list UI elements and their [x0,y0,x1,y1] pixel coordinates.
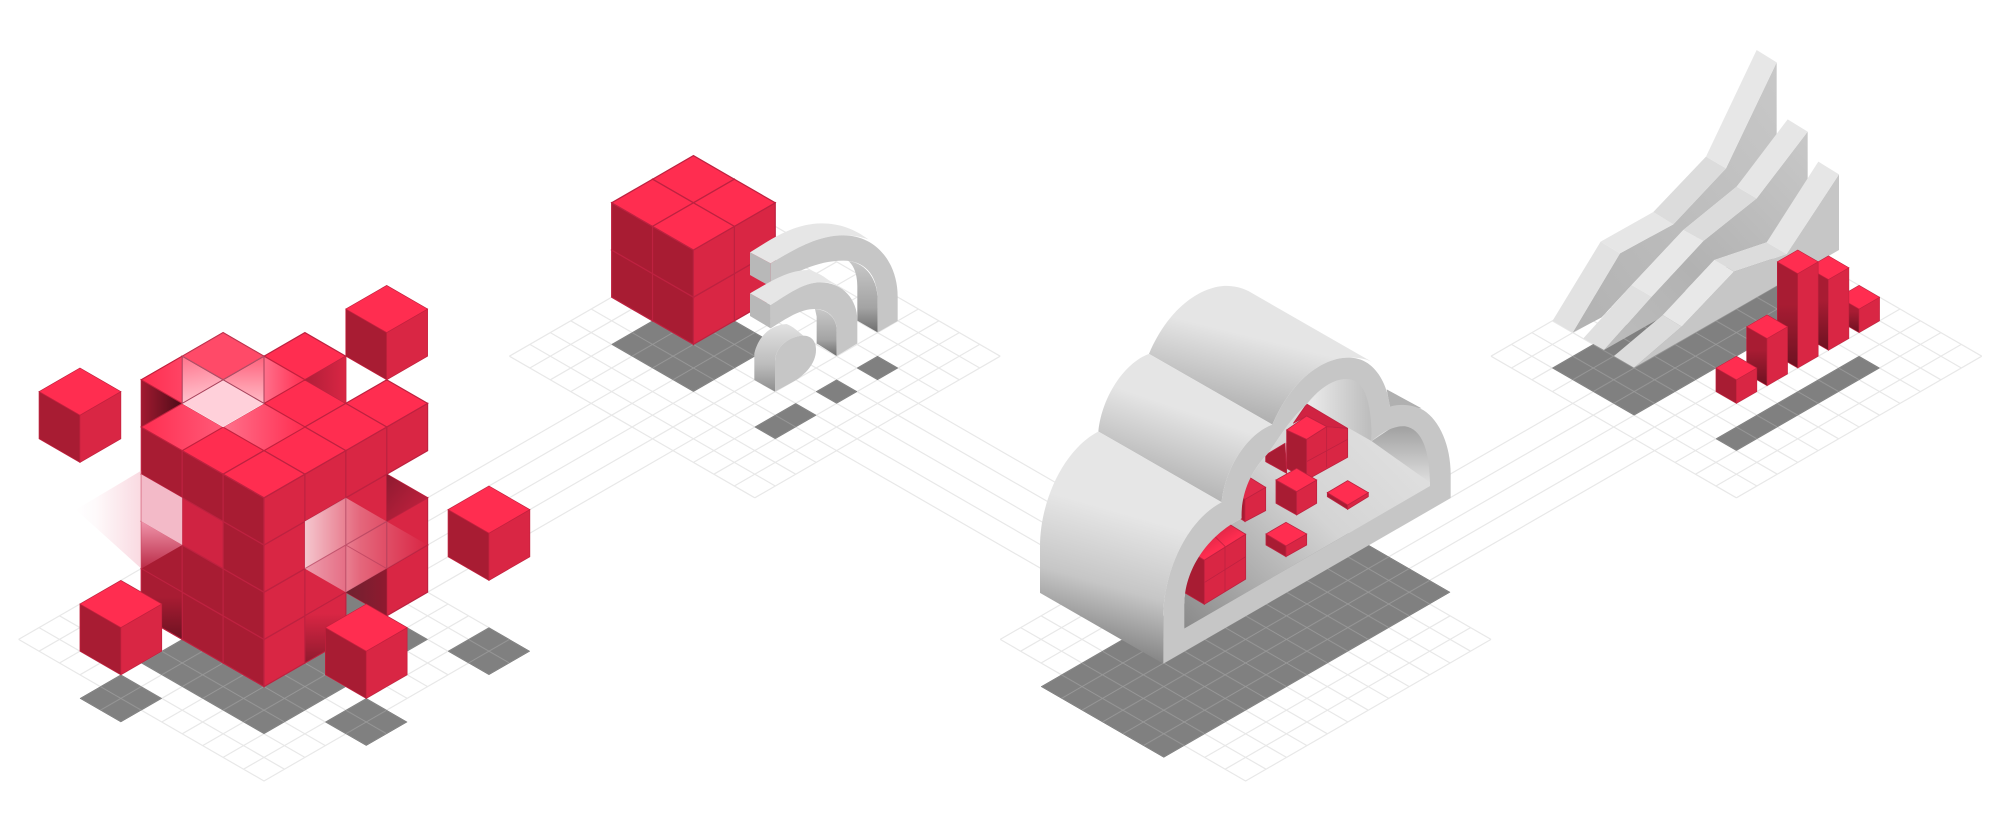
floor shadow 3 [1041,521,1450,757]
cloud outer surfaces [1040,286,1422,664]
icon: extruded cloud [1040,286,1451,664]
floor grid 1 [19,498,509,781]
wifi dot [754,324,816,392]
floor shadows 4 [1552,250,1880,451]
bar 3 [1777,250,1818,368]
panel: cloud [1000,286,1491,781]
glass highlights and shading on the stack [76,333,428,663]
cube stack [141,333,428,687]
connecting grid lines [346,403,1655,592]
floor shadows 1 [80,569,530,746]
floor grid 2 [509,215,1000,498]
panel: wifi and cube [509,156,1000,498]
icon: wifi symbol [750,223,898,392]
outer wifi arc [750,223,898,332]
bar 5 [1839,285,1880,333]
floor shadows 2 [612,297,898,439]
panel: growth chart [1491,50,1982,498]
bar chart [1716,250,1880,403]
middle wifi arc [750,270,857,356]
cloud front face [1163,358,1451,664]
cloud interior [1184,376,1432,628]
line chart ribbons [1553,50,1839,368]
red cube 2x2x2 [612,156,775,344]
bar 4 [1808,256,1849,350]
red blocks inside the cloud [1185,404,1368,604]
floating cubes [39,285,530,698]
upper blocks [1239,404,1368,557]
floor grid 3 [1000,498,1491,781]
front ribbon [1614,162,1839,368]
floor grid 4 [1491,215,1982,498]
bar 2 [1747,315,1788,386]
back ribbon [1553,50,1777,333]
bar 1 [1716,356,1757,403]
middle ribbon [1583,119,1808,350]
lower left block [1185,525,1246,604]
panel: data cube block [19,285,530,781]
